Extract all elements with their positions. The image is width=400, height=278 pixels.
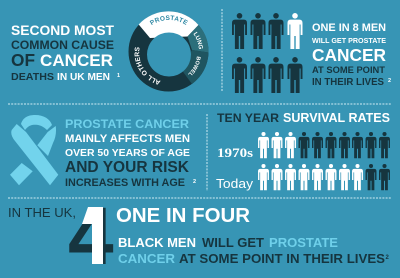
chart: cancer deaths donut: PROSTATE — [150, 15, 188, 25]
text: second most common cause — [11, 23, 120, 83]
text: second most common cause: OF — [11, 50, 35, 70]
text: one in 8 men: IN THEIR LIVES — [312, 77, 384, 88]
text: one in 8 men: CANCER — [312, 45, 387, 65]
text: black men statement — [118, 235, 390, 266]
text: prostate cancer age risk — [65, 117, 196, 189]
text: second most common cause: DEATHS — [11, 72, 54, 83]
pictogram: one in 8 men — [232, 13, 302, 93]
chart: cancer deaths donut: LUNG — [194, 32, 203, 49]
text: prostate cancer age risk: 2 — [193, 179, 196, 185]
text: black men statement: AT SOME POINT IN THEIR LIVES — [179, 251, 385, 266]
text: prostate cancer age risk: INCREASES WITH AGE — [65, 177, 186, 189]
text: black men statement: CANCER — [118, 251, 175, 266]
label: 1970s: 1970s — [217, 146, 253, 160]
text: second most common cause: COMMON CAUSE — [11, 38, 114, 52]
icon: awareness ribbon — [10, 115, 58, 185]
text: prostate cancer age risk: MAINLY AFFECTS MEN — [65, 133, 190, 145]
text: one in 8 men: WILL GET PROSTATE — [312, 36, 386, 45]
text: one in 8 men — [312, 22, 391, 88]
heading: ten year survival rates: SURVIVAL RATES — [283, 111, 390, 125]
text: prostate cancer age risk: OVER 50 YEARS OF AGE — [65, 148, 190, 159]
text: second most common cause: CANCER — [40, 51, 113, 70]
chart: cancer deaths donut — [128, 11, 208, 92]
heading: ten year survival rates — [217, 111, 390, 125]
chart: cancer deaths donut: BOWEL — [188, 56, 201, 76]
text: second most common cause: SECOND MOST — [11, 23, 115, 38]
text: black men statement: 2 — [386, 255, 390, 261]
pictogram: 1970s survival — [258, 132, 390, 158]
text: black men statement: PROSTATE — [269, 236, 338, 250]
heading: ten year survival rates: TEN YEAR — [217, 111, 279, 125]
text: second most common cause: 1 — [117, 73, 120, 79]
text: black men statement: BLACK MEN — [118, 235, 196, 250]
text: prostate cancer age risk: PROSTATE CANCER — [65, 117, 189, 131]
text: in the uk: IN THE UK, — [8, 206, 76, 220]
pictogram: today survival — [258, 164, 390, 190]
text: second most common cause: IN UK MEN — [57, 72, 110, 83]
text: one in 8 men: ONE IN 8 MEN — [312, 22, 386, 34]
text: prostate cancer age risk: AND YOUR RISK — [65, 159, 190, 176]
chart: cancer deaths donut: ALL OTHERS — [134, 47, 160, 85]
text: one in 8 men: 2 — [388, 78, 391, 84]
text: one in 8 men: AT SOME POINT — [312, 65, 385, 75]
text: black men statement: WILL GET — [202, 235, 264, 250]
heading: one in four: ONE IN FOUR — [116, 205, 250, 227]
label: today: Today — [216, 176, 253, 191]
